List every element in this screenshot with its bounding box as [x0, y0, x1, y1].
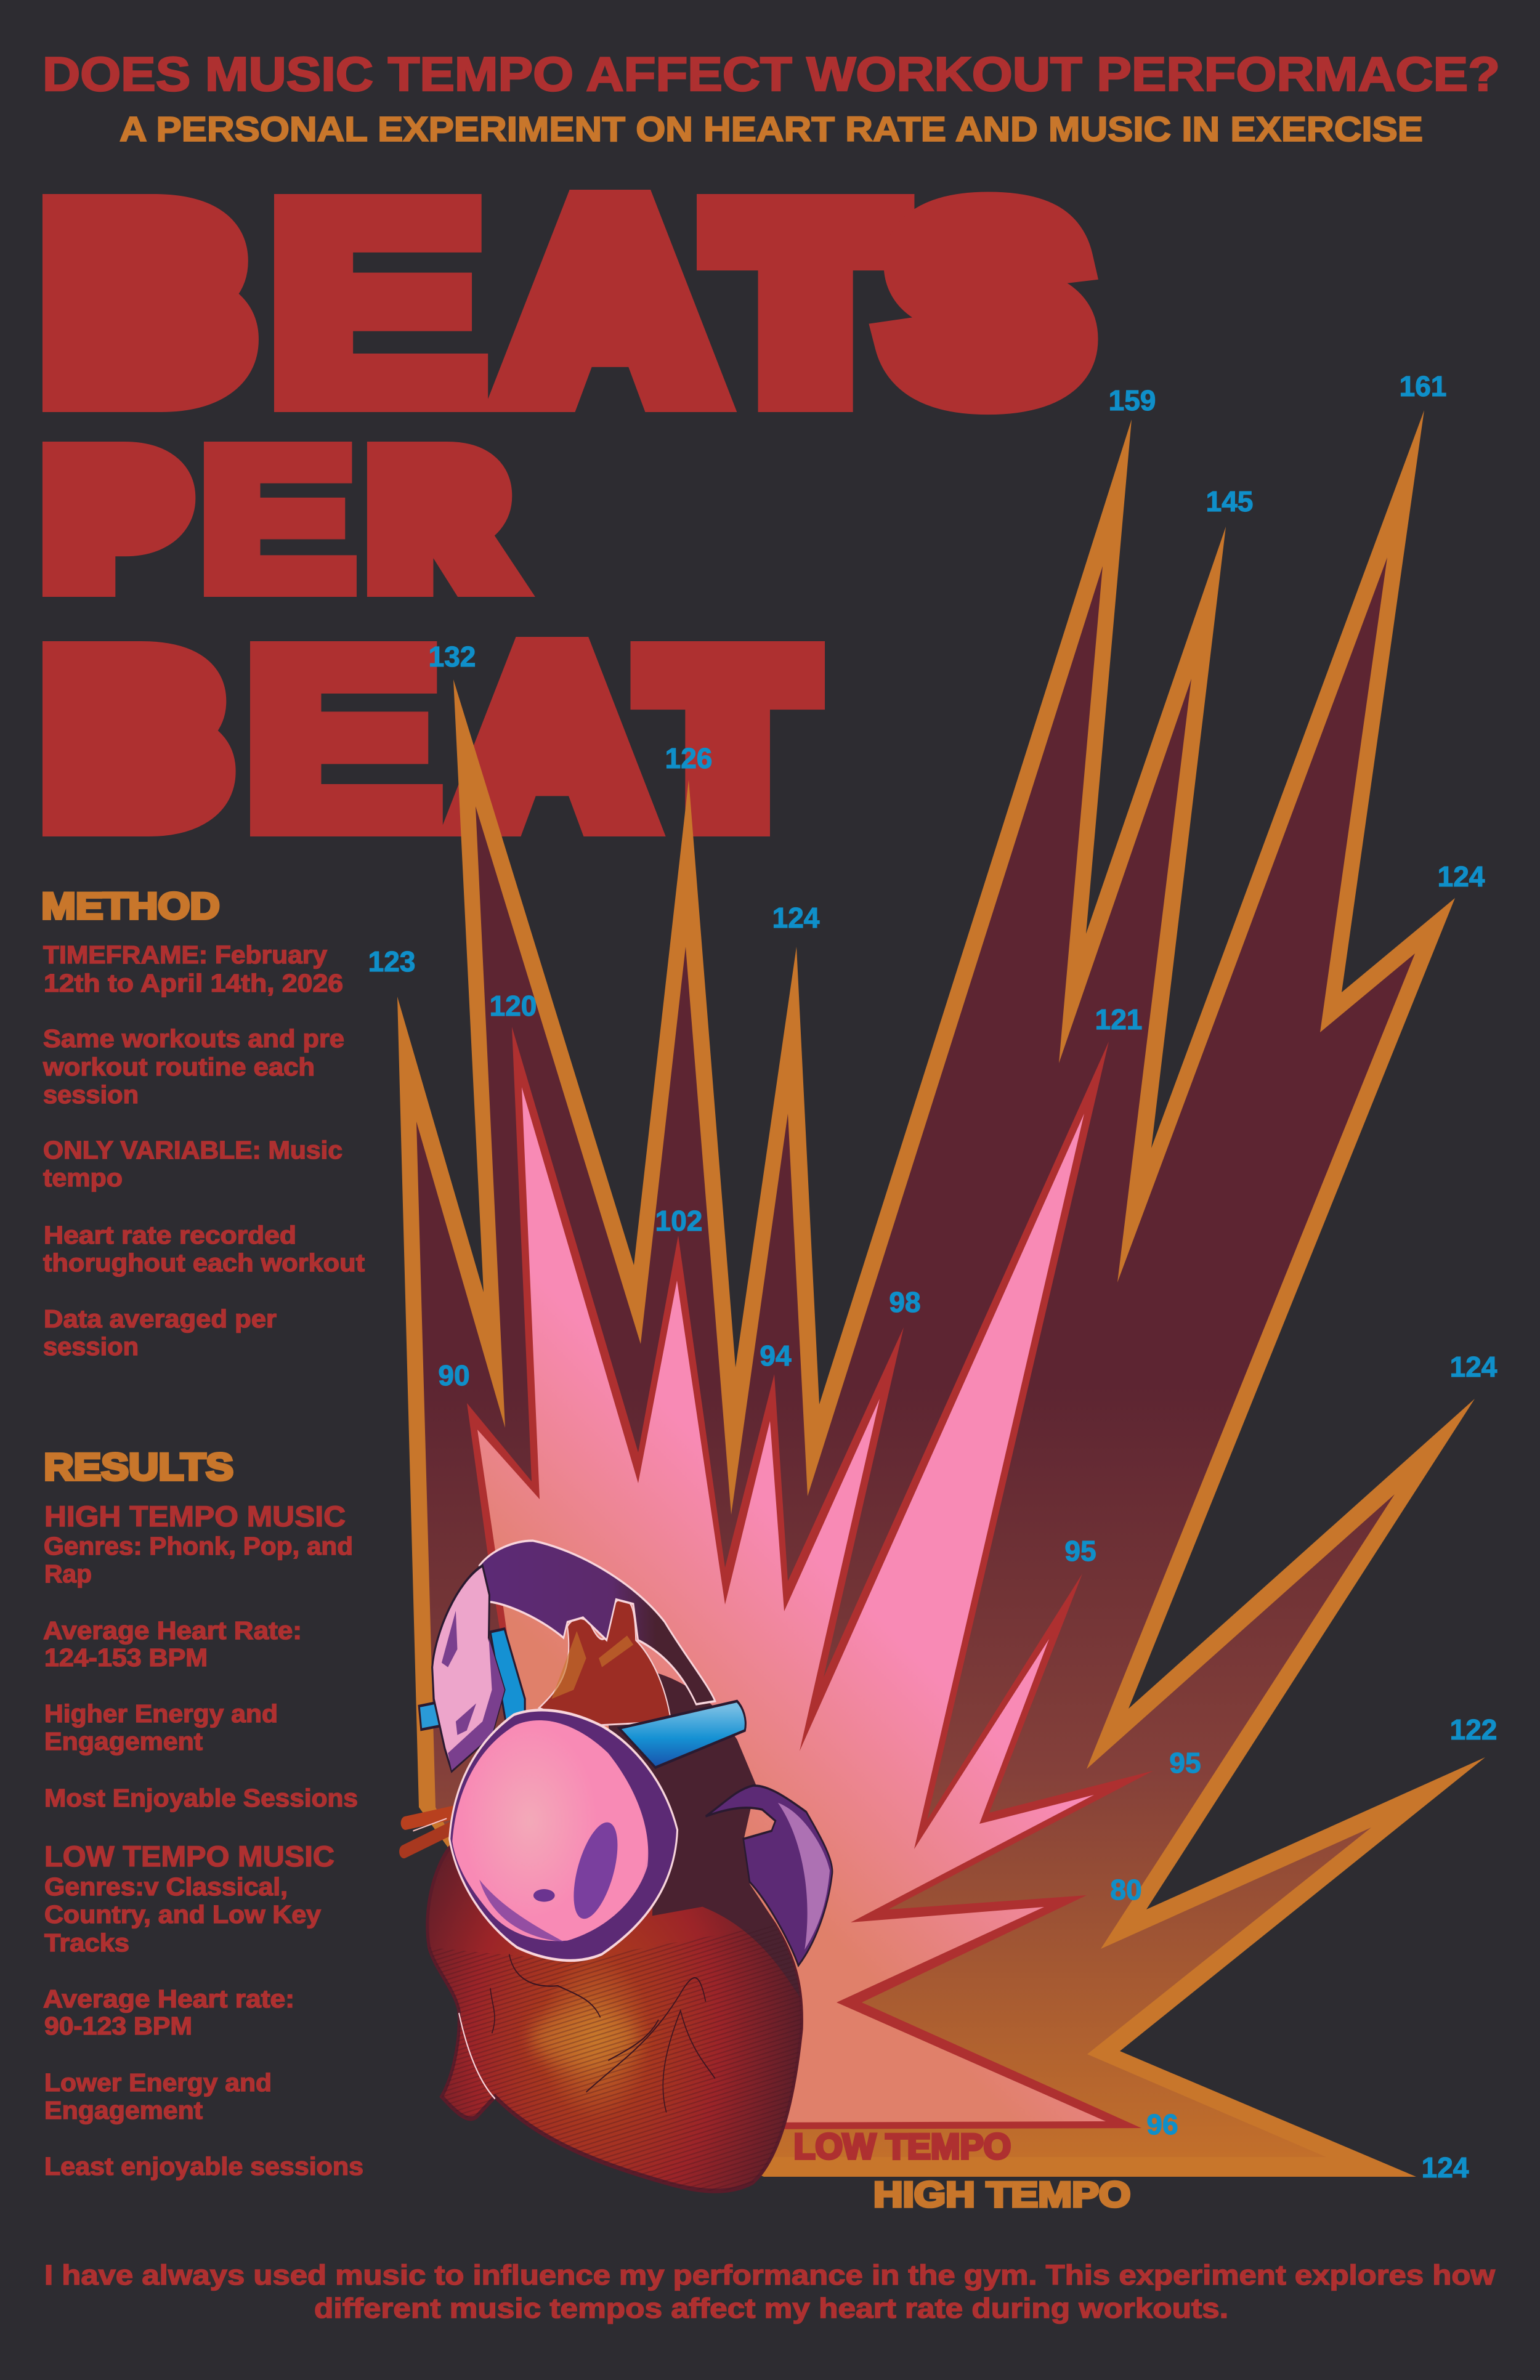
data labels: 90: [438, 1359, 470, 1391]
blue tube right: [619, 1701, 745, 1768]
method heading: METHOD: [41, 886, 220, 927]
dome shadow: [565, 1813, 626, 1928]
big heading: beats per beat: B: [51, 615, 223, 861]
subtitle: A PERSONAL EXPERIMENT ON HEART RATE AND MUSIC IN EXERCISE: [120, 110, 1423, 149]
results text: Engagement: [44, 1727, 203, 1755]
results text: Lower Energy and: [44, 2068, 272, 2097]
right earcup: [706, 1786, 832, 1965]
heart hatching: [429, 1925, 801, 2191]
results heading: RESULTS: [44, 1446, 233, 1488]
white rim line: [459, 2013, 495, 2099]
data labels: 122: [1450, 1714, 1497, 1746]
results text: [43, 1500, 363, 2180]
big heading: beats per beat: A: [464, 608, 641, 865]
data labels: 124: [1438, 860, 1485, 892]
big heading: beats per beat: T: [652, 616, 803, 862]
data labels: 95: [1169, 1747, 1201, 1779]
data labels: 96: [1146, 2108, 1178, 2140]
footer statement: I have always used music to influence my performance in the gym. This experiment explores how: [44, 2259, 1496, 2291]
big heading: beats per beat: B: [51, 166, 244, 440]
results text: 124-153 BPM: [44, 1643, 208, 1672]
big heading: beats per beat: [51, 148, 1081, 877]
heart highlight: [530, 2010, 636, 2065]
method text: ONLY VARIABLE: Music: [43, 1136, 342, 1164]
data labels: 161: [1400, 370, 1446, 402]
method text: [43, 941, 365, 1361]
left vessels: [404, 1813, 453, 1852]
results text: 90-123 BPM: [44, 2012, 192, 2040]
method text: tempo: [43, 1164, 123, 1192]
data labels: 126: [665, 742, 712, 774]
method text: thorughout each workout: [43, 1249, 365, 1277]
data labels: 132: [429, 641, 476, 673]
method text: Data averaged per: [44, 1305, 277, 1333]
small earcup: [432, 1566, 505, 1771]
big heading: beats per beat: E: [269, 148, 484, 457]
data labels: 124: [1450, 1351, 1497, 1383]
footer statement: different music tempos affect my heart rate during workouts.: [314, 2293, 1228, 2324]
data labels: 121: [1095, 1003, 1142, 1035]
method text: TIMEFRAME: February: [43, 941, 327, 969]
aorta shading: [552, 1631, 633, 1699]
method text: session: [43, 1332, 139, 1361]
small earcup shading: [442, 1611, 505, 1770]
data labels: 95: [1064, 1535, 1096, 1567]
results text: Genres: Phonk, Pop, and: [44, 1532, 353, 1560]
results text: Engagement: [44, 2096, 203, 2124]
results text: Tracks: [44, 1929, 129, 1957]
big heading: beats per beat: E: [245, 600, 440, 877]
method text: session: [43, 1080, 139, 1109]
high tempo series outline: [397, 410, 1485, 2177]
legend: low tempo: LOW TEMPO: [793, 2127, 1011, 2167]
heart body: [428, 1780, 801, 2191]
legend: high tempo: HIGH TEMPO: [873, 2176, 1130, 2215]
blue vessel left: [490, 1629, 525, 1724]
big heading: beats per beat: T: [721, 165, 890, 440]
big heading: beats per beat: R: [376, 426, 501, 612]
results text: Higher Energy and: [44, 1699, 278, 1728]
results text: LOW TEMPO MUSIC: [44, 1840, 334, 1872]
results text: Country, and Low Key: [44, 1900, 321, 1929]
headband: [479, 1540, 715, 1704]
high tempo series fill: [416, 557, 1415, 2157]
results text: Least enjoyable sessions: [44, 2152, 363, 2180]
data labels: 94: [760, 1340, 792, 1372]
data labels: 80: [1110, 1874, 1142, 1906]
right earcup highlight: [778, 1803, 830, 1949]
data labels: 120: [490, 990, 537, 1022]
big heading: beats per beat: S: [894, 166, 1081, 440]
blue vessel stub: [419, 1702, 440, 1730]
footer statement: [44, 2259, 1496, 2324]
data labels: 145: [1206, 485, 1253, 517]
data labels: 159: [1109, 384, 1156, 416]
low tempo series fill: [477, 1087, 1106, 2123]
results text: Most Enjoyable Sessions: [44, 1784, 358, 1812]
low tempo series outline: [467, 1027, 1153, 2129]
method text: workout routine each: [43, 1053, 315, 1081]
dark upper heart mass: [602, 1669, 756, 1907]
aorta: [539, 1600, 671, 1726]
method text: Heart rate recorded: [44, 1221, 296, 1249]
data labels: 123: [368, 945, 415, 977]
data labels: 102: [655, 1205, 702, 1237]
data labels: 98: [889, 1286, 921, 1318]
results text: Genres:v Classical,: [44, 1872, 288, 1901]
heart shadow: [652, 1767, 800, 1997]
illustration: heart wearing headphones: [404, 1540, 832, 2191]
data labels: [368, 370, 1497, 2184]
large earcup dome: [452, 1720, 648, 1941]
method text: Same workouts and pre: [43, 1024, 344, 1053]
big heading: beats per beat: A: [511, 158, 709, 444]
method text: 12th to April 14th, 2026: [44, 969, 343, 997]
results text: Rap: [44, 1560, 92, 1588]
data labels: 124: [772, 902, 820, 934]
results text: HIGH TEMPO MUSIC: [44, 1500, 346, 1532]
dome spot: [533, 1889, 555, 1902]
chart: heart rate burst: [397, 410, 1485, 2177]
results text: Average Heart Rate:: [43, 1616, 302, 1645]
results text: Average Heart rate:: [43, 1985, 294, 2013]
dome lower shading: [479, 1880, 564, 1942]
big heading: beats per beat: E: [200, 408, 354, 629]
big heading: beats per beat: P: [52, 426, 179, 612]
heart vessels: [490, 1954, 715, 2112]
large earcup: [450, 1710, 678, 1961]
data labels: 124: [1422, 2151, 1469, 2184]
title: DOES MUSIC TEMPO AFFECT WORKOUT PERFORMACE?: [43, 47, 1500, 101]
